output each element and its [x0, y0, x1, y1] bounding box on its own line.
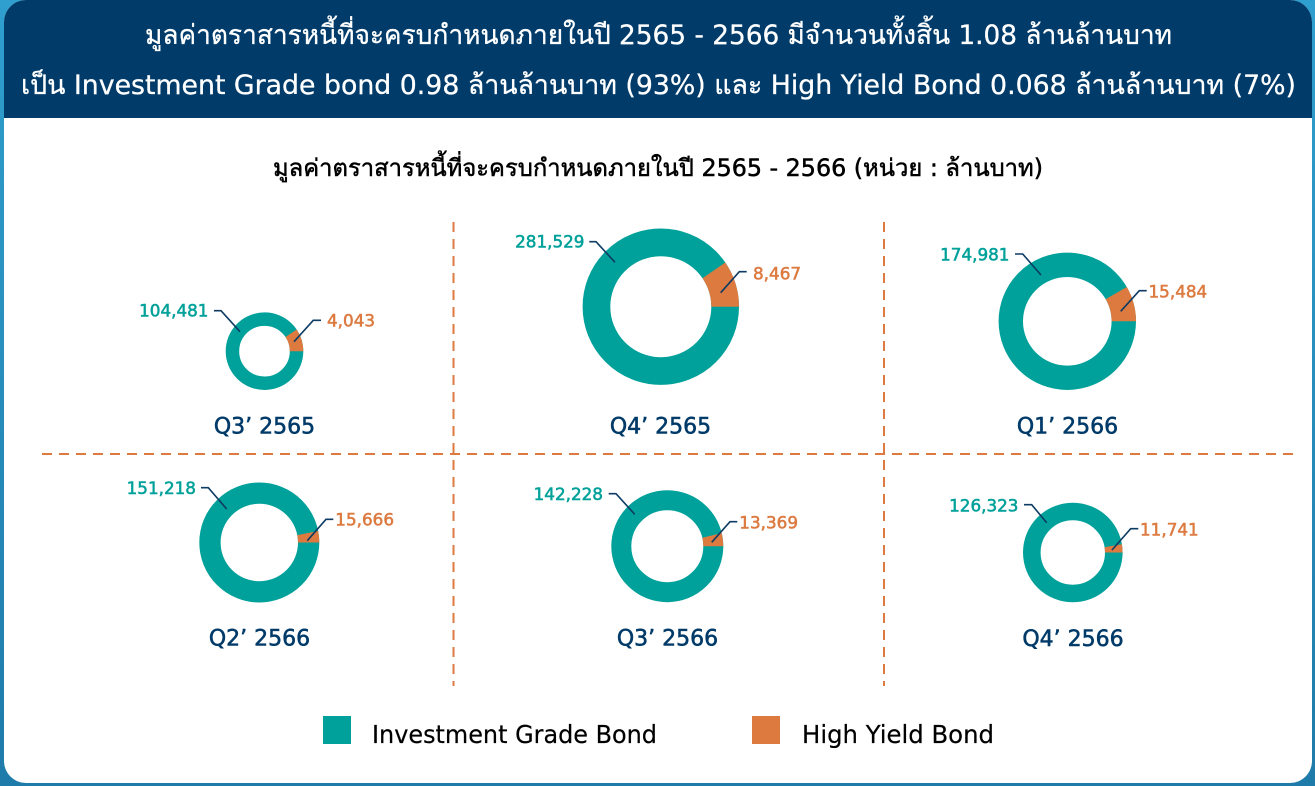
- header line 1: มูลค่าตราสารหนี้ที่จะครบกำหนดภายในปี 2565 - 2566 มีจำนวนทั้งสิ้น 1.08 ล้านล้านบาท: [145, 15, 1172, 51]
- leader lines: [1024, 505, 1138, 550]
- quarter label: Q3’ 2565: [214, 414, 315, 440]
- quarter label: Q3’ 2566: [617, 627, 718, 652]
- leader lines: [589, 242, 747, 293]
- panel: Q4 2566: [949, 496, 1199, 652]
- panel: Q3 2566: [534, 484, 798, 652]
- value: investment grade: 104,481: [139, 301, 208, 321]
- value: investment grade: 151,218: [127, 478, 196, 498]
- leader lines: [1015, 254, 1147, 311]
- header line 2: เป็น Investment Grade bond 0.98 ล้านล้านบาท (93%) และ High Yield Bond 0.068 ล้านล้านบาท (7%): [21, 67, 1296, 101]
- value: high yield: 13,369: [739, 512, 798, 532]
- value: high yield: 15,666: [335, 510, 394, 530]
- value: high yield: 8,467: [753, 263, 801, 283]
- value: high yield: 11,741: [1140, 520, 1199, 540]
- quarter label: Q4’ 2565: [610, 414, 711, 440]
- leader lines: [609, 494, 737, 542]
- legend: [323, 716, 994, 749]
- leader lines: [201, 488, 333, 541]
- donut chart: Q2 2566: [210, 493, 319, 592]
- quarter label: Q4’ 2566: [1022, 627, 1124, 652]
- donut chart: Q3 2566: [621, 500, 723, 592]
- donut chart: Q4 2565: [596, 242, 739, 371]
- panel: Q1 2566: [940, 245, 1207, 440]
- value: investment grade: 126,323: [949, 496, 1018, 516]
- value: high yield: 15,484: [1148, 281, 1207, 301]
- legend swatch: investment grade: [323, 716, 351, 744]
- panel: Q2 2566: [127, 478, 394, 652]
- grid dividers: [42, 222, 1295, 686]
- donut chart: Q3 2565: [232, 319, 303, 383]
- panel: Q4 2565: [515, 231, 801, 440]
- chart heading: มูลค่าตราสารหนี้ที่จะครบกำหนดภายในปี 2565 - 2566 (หน่วย : ล้านบาท): [273, 150, 1043, 183]
- value: investment grade: 174,981: [940, 245, 1010, 265]
- leader lines: [214, 311, 321, 342]
- panel: Q3 2565: [139, 301, 375, 440]
- quarter label: Q1’ 2566: [1017, 414, 1118, 440]
- quarter label: Q2’ 2566: [209, 627, 310, 652]
- header banner: [4, 0, 1312, 118]
- donut chart: Q4 2566: [1032, 512, 1123, 594]
- legend swatch: high yield: [752, 716, 780, 744]
- legend label: investment grade: Investment Grade Bond: [372, 720, 657, 749]
- value: investment grade: 142,228: [534, 484, 603, 504]
- donut chart: Q1 2566: [1011, 265, 1136, 378]
- value: investment grade: 281,529: [515, 231, 584, 251]
- legend label: high yield: High Yield Bond: [802, 720, 994, 749]
- value: high yield: 4,043: [327, 311, 375, 331]
